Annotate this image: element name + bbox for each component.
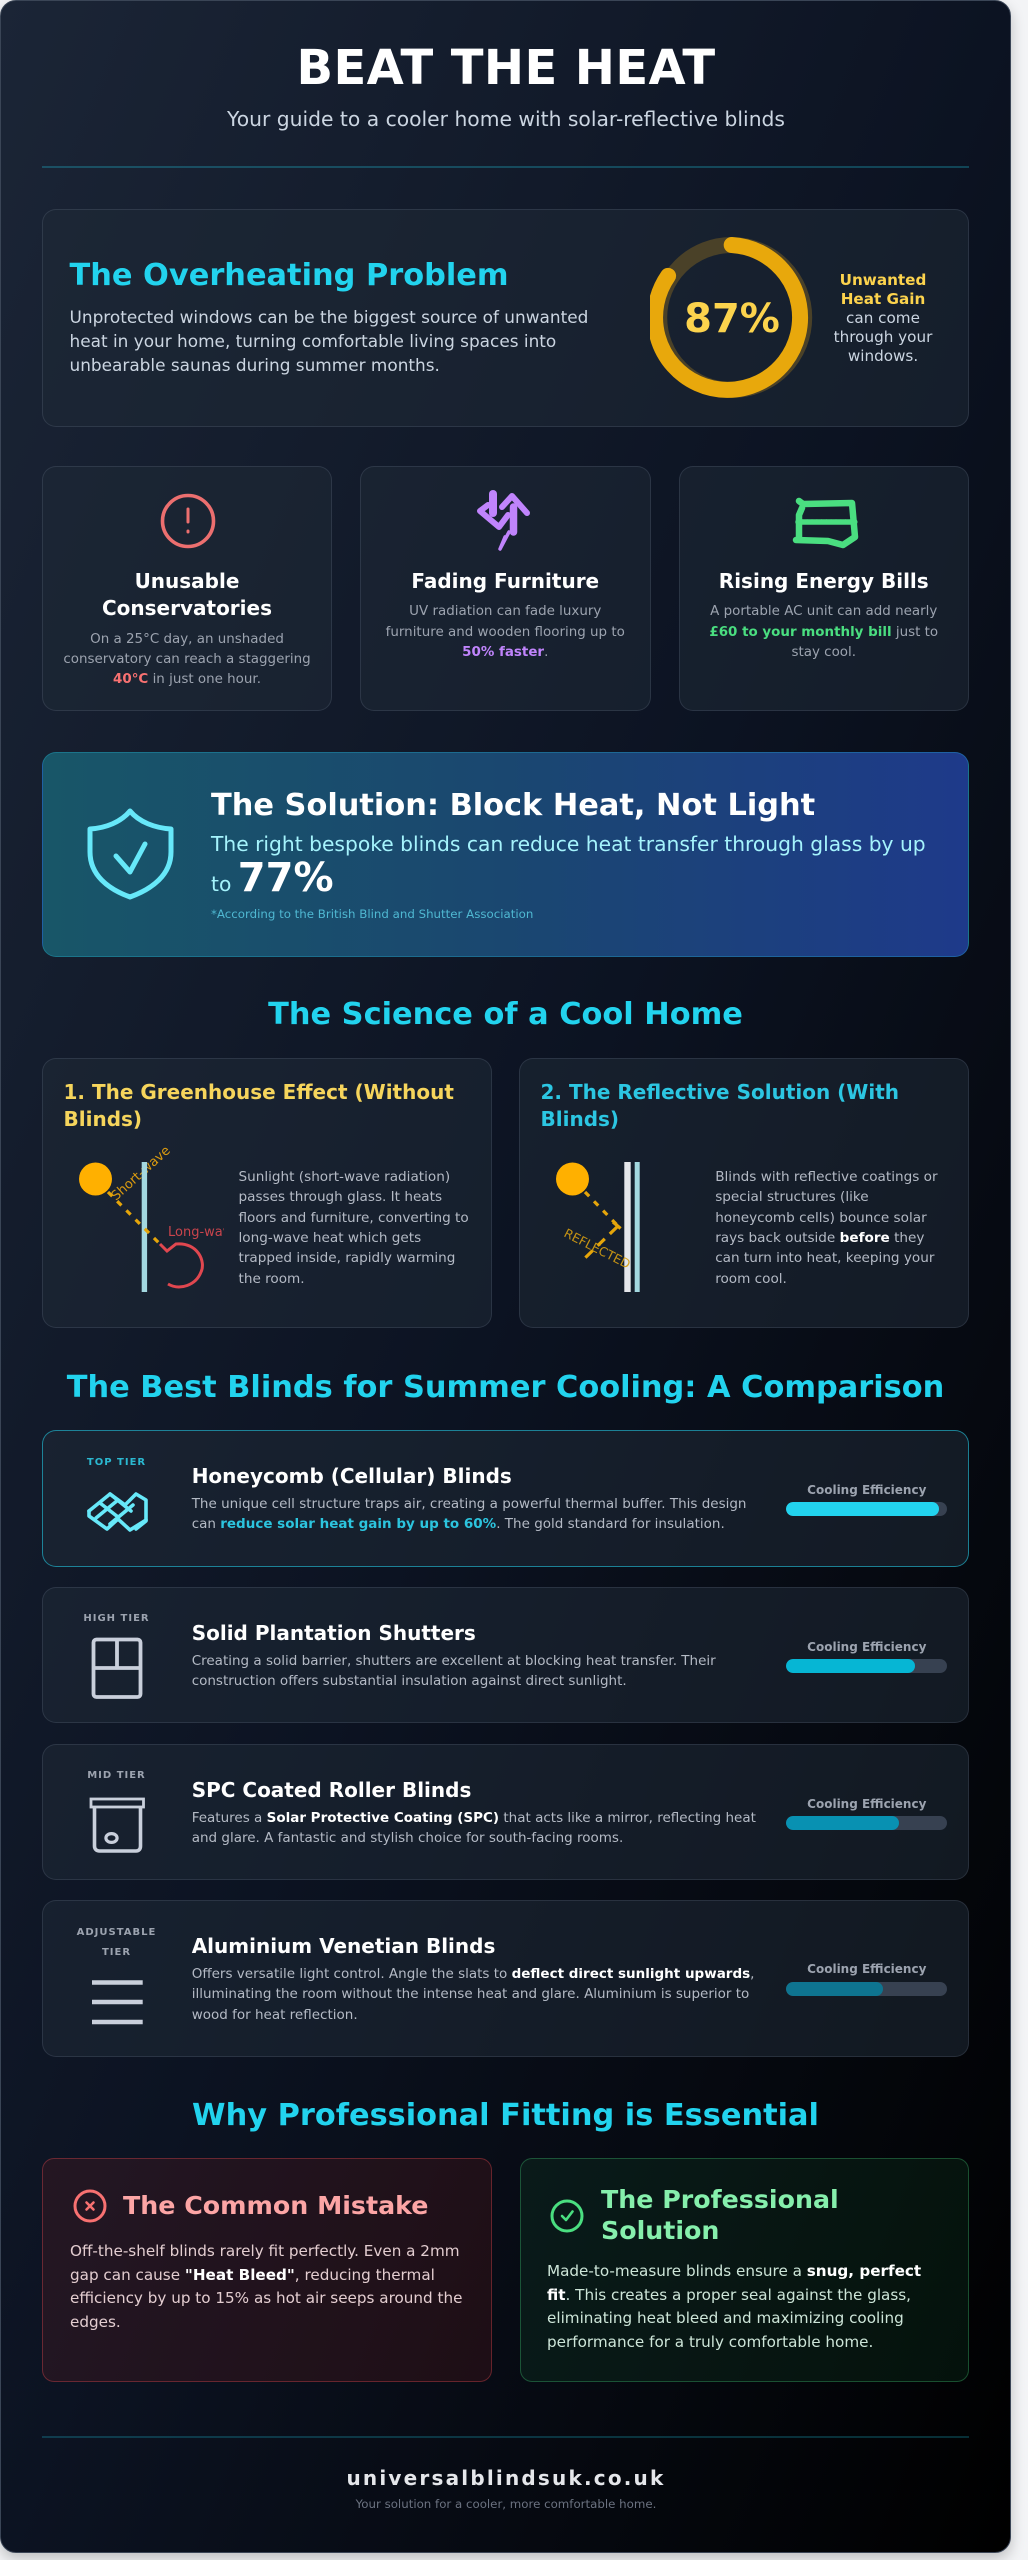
- efficiency label: Cooling Efficiency: [807, 1483, 926, 1497]
- text: special structures (like: [715, 1189, 869, 1205]
- blind name: SPC Coated Roller Blinds: [192, 1778, 471, 1802]
- description: wood for heat reflection.: [192, 2007, 358, 2023]
- panel: the professional solution: [520, 2158, 969, 2382]
- footer: site name: universalblindsuk.co.uk: [346, 2466, 666, 2490]
- heading: science: The Science of a Cool Home: [268, 997, 743, 1032]
- chart: 87% donut: [650, 237, 812, 398]
- efficiency bar: [786, 1502, 947, 1516]
- heading: Conservatories: [102, 596, 272, 620]
- diagram: greenhouse: Short-wave: [109, 1145, 174, 1204]
- icon: shield check: [88, 808, 174, 900]
- tier label: HIGH TIER: [83, 1612, 150, 1624]
- text: room cool.: [715, 1271, 787, 1287]
- description: [192, 1496, 746, 1532]
- icon: venetian slats: [92, 1980, 143, 2024]
- text: [547, 2262, 921, 2350]
- text: long-wave heat which gets: [238, 1230, 421, 1246]
- panel: the common mistake: [42, 2158, 492, 2382]
- heading: professional fitting: Why Professional Fitting is Essential: [192, 2098, 819, 2133]
- heading: 1. The Greenhouse Effect (Without: [64, 1080, 454, 1104]
- callout: unwanted heat gain: Unwanted: [840, 270, 926, 288]
- callout: unwanted heat gain: Heat Gain: [841, 290, 925, 308]
- heading: [540, 1080, 899, 1131]
- panel: rising energy bills: [678, 466, 969, 710]
- text: gap can cause "Heat Bleed", reducing thermal: [70, 2266, 435, 2284]
- tier label: [76, 1926, 156, 1958]
- heading: the solution: The Solution: Block Heat, Not Light: [211, 788, 815, 823]
- chart: 87% donut: 87%: [684, 296, 780, 342]
- panel: greenhouse effect: [42, 1058, 492, 1328]
- panel: aluminium venetian blinds: [42, 1900, 969, 2057]
- heading: The Common Mistake: [123, 2191, 428, 2220]
- icon: sun fade scribble: [477, 490, 530, 551]
- description: [192, 1810, 756, 1846]
- text: Off-the-shelf blinds rarely fit perfectly. Even a 2mm: [70, 2242, 460, 2260]
- heading: [102, 569, 272, 620]
- efficiency label: Cooling Efficiency: [807, 1797, 926, 1811]
- heading: Fading Furniture: [411, 569, 599, 593]
- text: eliminating heat bleed and maximizing cooling: [547, 2309, 904, 2327]
- efficiency bar: [786, 1982, 947, 1996]
- heading: Solution: [601, 2216, 719, 2244]
- panel: fading furniture: [360, 466, 650, 710]
- icon: x circle: [74, 2190, 106, 2222]
- heading: Rising Energy Bills: [719, 569, 929, 593]
- description: The unique cell structure traps air, creating a powerful thermal buffer. This design: [192, 1496, 746, 1512]
- text: A portable AC unit can add nearly: [710, 604, 937, 619]
- heading: Blinds): [64, 1107, 142, 1131]
- heading: 2. The Reflective Solution (With: [540, 1080, 899, 1104]
- description: construction offers substantial insulation against direct sunlight.: [192, 1673, 627, 1689]
- blind name: Honeycomb (Cellular) Blinds: [192, 1464, 512, 1488]
- text: [709, 604, 938, 660]
- text: [63, 632, 311, 687]
- text: On a 25°C day, an unshaded: [90, 632, 284, 646]
- callout: unwanted heat gain: through your: [834, 328, 932, 346]
- text: edges.: [70, 2312, 121, 2330]
- text: the room.: [238, 1271, 305, 1287]
- footer: tagline: Your solution for a cooler, more comfortable home.: [356, 2497, 656, 2511]
- text: [386, 604, 625, 660]
- panel: spc roller blinds: [42, 1744, 969, 1880]
- stat: 77%: to 77%: [211, 855, 334, 901]
- tier label: ADJUSTABLE: [77, 1926, 156, 1938]
- text: stay cool.: [791, 645, 856, 660]
- icon: honeycomb: [87, 1492, 148, 1532]
- text: overheating description: [70, 307, 588, 375]
- description: Offers versatile light control. Angle the slats to deflect direct sunlight upwards,: [192, 1966, 754, 1982]
- callout: unwanted heat gain: windows.: [848, 346, 918, 364]
- heading: [601, 2185, 839, 2244]
- footnote: *According to the British Blind and Shutter Association: [211, 907, 533, 921]
- text: conservatory can reach a staggering: [63, 652, 311, 667]
- description: can reduce solar heat gain by up to 60%. The gold standard for insulation.: [192, 1516, 725, 1532]
- blind name: Aluminium Venetian Blinds: [192, 1934, 495, 1958]
- text: overheating description: unbearable saunas during summer months.: [70, 355, 440, 375]
- tier label: MID TIER: [87, 1770, 146, 1780]
- text: [70, 2242, 462, 2330]
- text: [715, 1169, 938, 1287]
- text: Blinds with reflective coatings or: [715, 1169, 938, 1185]
- icon: roller blind: [90, 1798, 145, 1853]
- icon: air conditioner scribble: [792, 498, 858, 548]
- text: 50% faster.: [462, 645, 548, 660]
- text: trapped inside, rapidly warming: [238, 1250, 455, 1266]
- text: [238, 1169, 469, 1287]
- text: overheating description: Unprotected windows can be the biggest source of unwanted: [70, 307, 588, 327]
- diagram: reflective blind: REFLECTED: [562, 1225, 633, 1272]
- text: overheating description: heat in your home, turning comfortable living spaces into: [70, 331, 556, 351]
- text: can turn into heat, keeping your: [715, 1250, 934, 1266]
- blind name: Solid Plantation Shutters: [192, 1621, 476, 1645]
- icon: shutters: [92, 1638, 142, 1699]
- text: honeycomb cells) bounce solar: [715, 1210, 927, 1226]
- heading: comparison: The Best Blinds for Summer Cooling: A Comparison: [67, 1370, 944, 1405]
- text: passes through glass. It heats: [238, 1189, 442, 1205]
- callout: unwanted heat gain: [834, 270, 932, 364]
- callout: unwanted heat gain: can come: [846, 308, 920, 326]
- text: rays back outside before they: [715, 1230, 924, 1246]
- diagram: reflective blind: [556, 1162, 640, 1292]
- text: £60 to your monthly bill just to: [709, 625, 938, 640]
- subtitle: Your guide to a cooler home with solar-reflective blinds: [227, 107, 785, 131]
- panel: unusable conservatories: [42, 466, 332, 710]
- text: performance for a truly comfortable home.: [547, 2332, 873, 2350]
- text: 77% claim: The right bespoke blinds can reduce heat transfer through glass by up: [211, 832, 926, 856]
- text: Sunlight (short-wave radiation): [238, 1169, 450, 1185]
- text: UV radiation can fade luxury: [409, 604, 601, 619]
- heading: Blinds): [540, 1107, 619, 1131]
- heading: The Professional: [601, 2185, 839, 2214]
- heading: Unusable: [135, 569, 239, 593]
- panel: plantation shutters: [42, 1587, 969, 1723]
- title: BEAT THE HEAT: [296, 40, 716, 96]
- description: [192, 1966, 754, 2023]
- efficiency label: Cooling Efficiency: [807, 1962, 926, 1976]
- panel: the overheating problem: [42, 209, 969, 427]
- tier label: TOP TIER: [87, 1456, 146, 1468]
- description: [192, 1653, 716, 1689]
- description: and glare. A fantastic and stylish choice for south-facing rooms.: [192, 1830, 623, 1846]
- diagram: greenhouse: [79, 1145, 224, 1292]
- icon: check circle: [550, 2200, 584, 2232]
- panel: honeycomb blinds: [42, 1430, 969, 1567]
- efficiency label: Cooling Efficiency: [807, 1640, 926, 1654]
- description: illuminating the room without the intense heat and glare. Aluminium is superior to: [192, 1986, 749, 2002]
- text: floors and furniture, converting to: [238, 1210, 469, 1226]
- text: efficiency by up to 15% as hot air seeps around the: [70, 2289, 462, 2307]
- text: 40°C in just one hour.: [113, 672, 261, 687]
- efficiency bar: [786, 1816, 947, 1830]
- tier label: TIER: [102, 1946, 131, 1958]
- description: Features a Solar Protective Coating (SPC) that acts like a mirror, reflecting heat: [192, 1810, 756, 1826]
- efficiency bar: [786, 1659, 947, 1673]
- heading: [64, 1080, 454, 1131]
- text: fit. This creates a proper seal against the glass,: [547, 2286, 911, 2304]
- description: Creating a solid barrier, shutters are excellent at blocking heat transfer. Their: [192, 1653, 716, 1669]
- text: furniture and wooden flooring up to: [386, 625, 625, 640]
- icon: alert circle: [160, 494, 216, 548]
- panel: reflective solution: [519, 1058, 969, 1328]
- text: Made-to-measure blinds ensure a snug, perfect: [547, 2262, 921, 2280]
- heading: overheating problem: The Overheating Problem: [70, 258, 509, 292]
- panel: the solution banner: [42, 752, 969, 956]
